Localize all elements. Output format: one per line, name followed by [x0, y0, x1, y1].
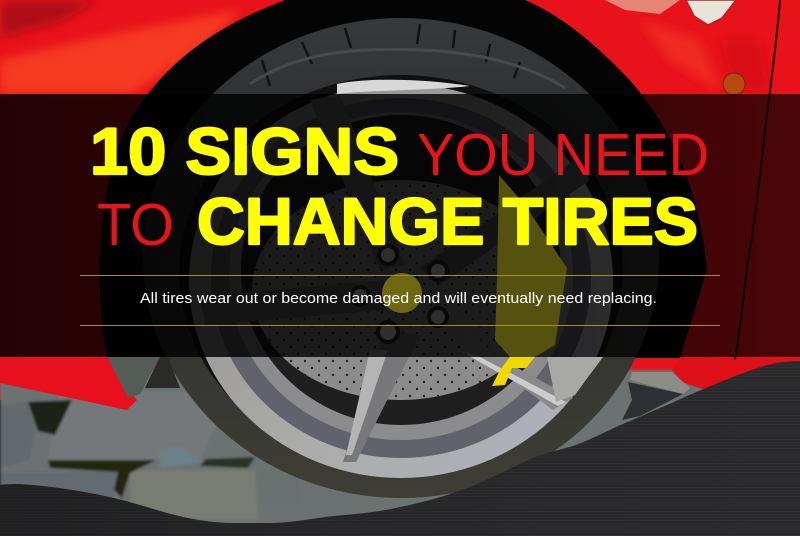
dark translucent band — [0, 94, 800, 357]
brake disc — [252, 180, 548, 400]
right lower sill — [672, 357, 800, 390]
top gold divider — [80, 274, 720, 276]
title line 1 light: YOU NEED: YOU NEED — [417, 122, 709, 188]
left body lip — [0, 357, 137, 410]
shadow behind flap — [145, 357, 180, 388]
rim — [189, 80, 613, 478]
channel highlight — [229, 112, 573, 440]
car body — [0, 0, 800, 400]
barrel shadow — [241, 115, 561, 425]
rim lip — [189, 84, 613, 478]
shield badge — [686, 0, 736, 25]
wheel bolts — [351, 246, 447, 342]
title line 2 light: TO: TO — [97, 192, 174, 258]
yellow caliper tip — [492, 357, 535, 386]
title line 1 bold: 10 SIGNS: 10 SIGNS — [90, 114, 399, 188]
round side marker — [723, 73, 745, 95]
chrome trim near badge — [605, 0, 680, 14]
door seam — [735, 0, 780, 360]
body reflections — [0, 0, 770, 94]
dimmed brake caliper — [495, 175, 567, 357]
left inner flap — [107, 357, 160, 398]
right rim section — [547, 357, 603, 402]
ground: cobblestones — [0, 370, 800, 536]
rim barrel channel — [211, 98, 591, 458]
bottom gold divider — [80, 324, 720, 326]
tread grooves — [250, 24, 565, 88]
title line 2 bold: CHANGE TIRES: CHANGE TIRES — [197, 184, 698, 258]
right sill gray trim — [630, 372, 690, 394]
subtitle: All tires wear out or become damaged and will eventually need replacing. — [140, 291, 657, 307]
dark road patch — [622, 382, 683, 420]
rim top highlight — [337, 80, 470, 94]
title — [90, 114, 709, 258]
wheel arch shadow — [100, 0, 707, 358]
gap between tire and rim — [179, 75, 623, 469]
tire — [143, 18, 659, 498]
bottom dark wave — [0, 361, 800, 536]
wheel spokes — [200, 95, 590, 462]
dimmed center hub cap — [382, 273, 422, 313]
